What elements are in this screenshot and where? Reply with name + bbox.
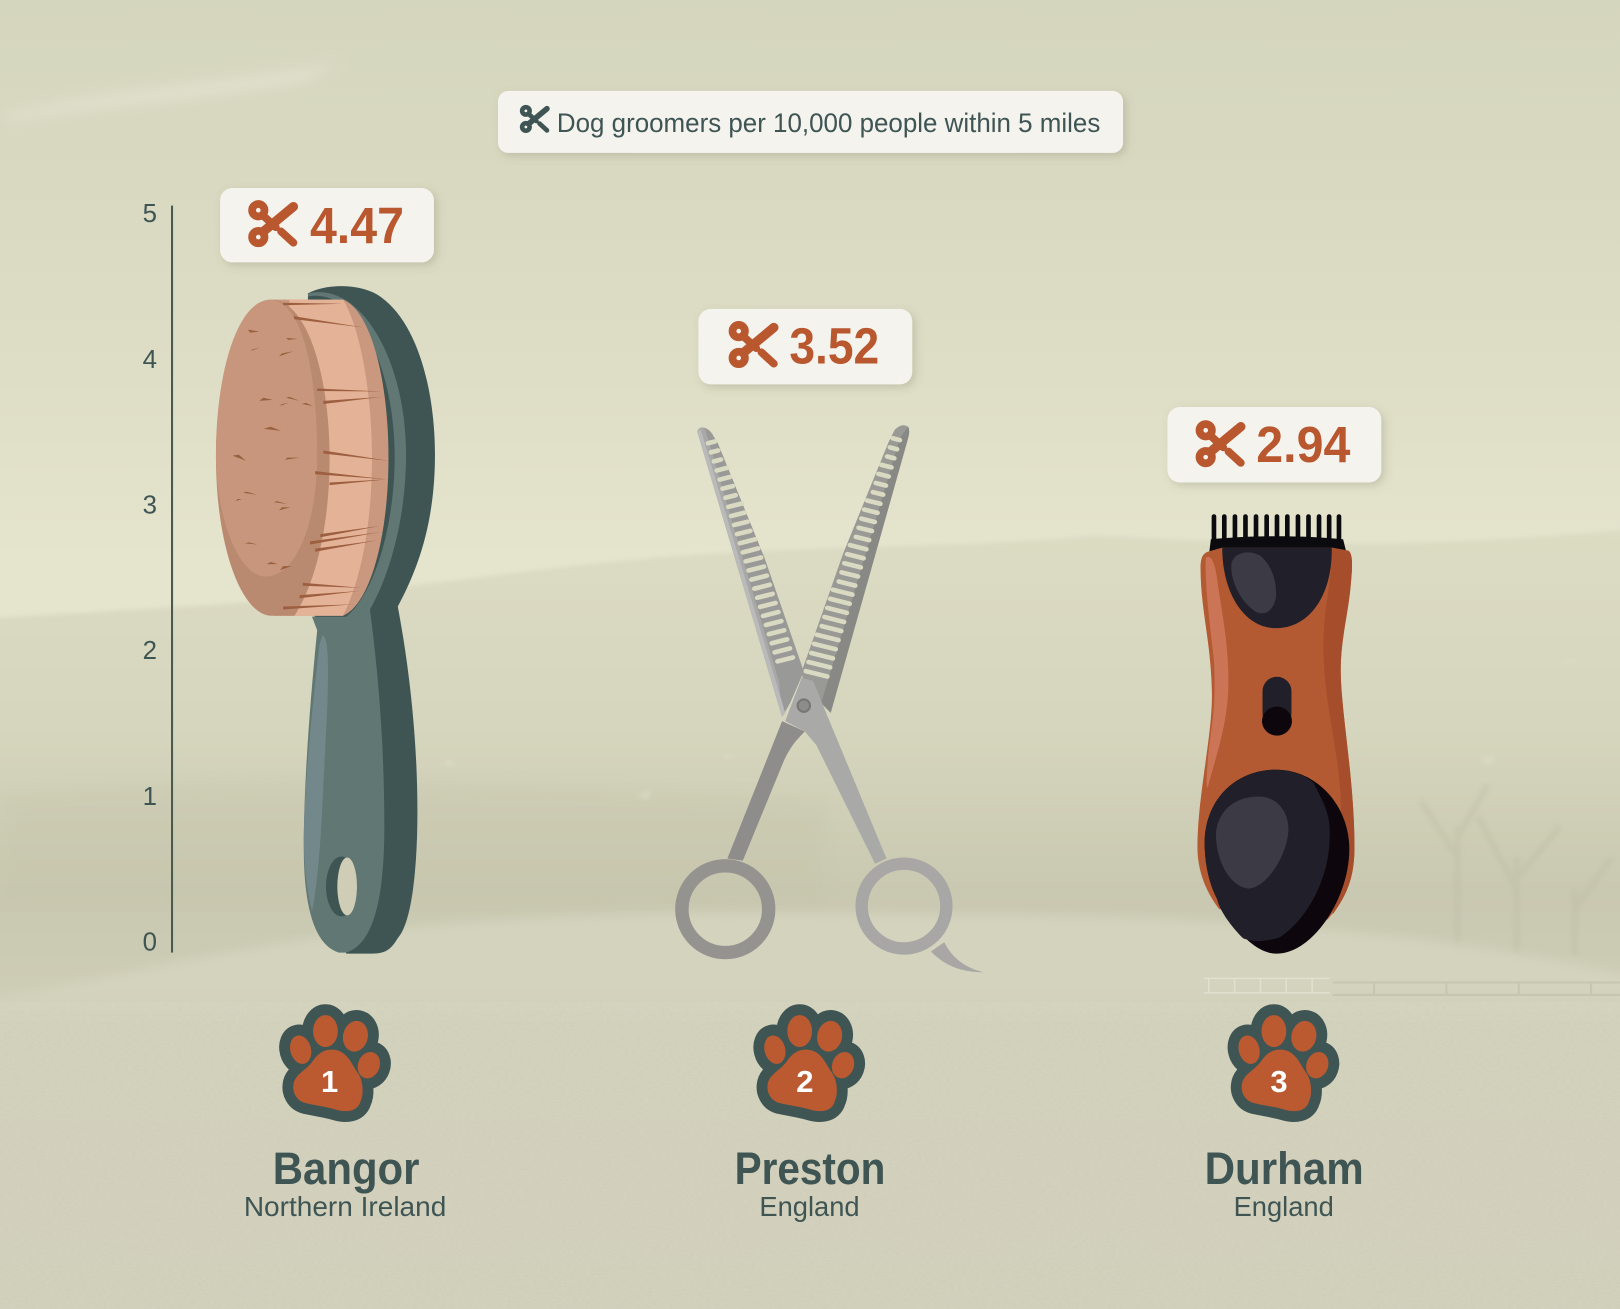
icon: scissors xyxy=(733,325,774,364)
value label: Durham xyxy=(1167,407,1381,482)
value label: Preston: 3.52 xyxy=(789,318,879,375)
clipper comb base xyxy=(1209,536,1346,556)
place label: Bangor xyxy=(244,1143,446,1222)
axis: 4 xyxy=(143,346,157,374)
place label: Bangor: Bangor xyxy=(273,1143,419,1194)
left blade xyxy=(697,428,804,717)
icon: scissors xyxy=(522,107,547,131)
icon: scissors xyxy=(1199,424,1241,463)
clipper teeth xyxy=(1214,517,1339,542)
finger rest xyxy=(931,942,984,972)
place label: Durham: England xyxy=(1234,1191,1334,1222)
axis: 2 xyxy=(143,637,157,665)
axis xyxy=(143,200,173,956)
value label: Durham: 2.94 xyxy=(1256,416,1350,473)
axis: 0 xyxy=(143,928,157,956)
rank badge 2: paw xyxy=(761,1015,858,1111)
clipper body xyxy=(1197,548,1354,920)
pivot screw xyxy=(798,699,810,712)
value label: Preston xyxy=(698,309,912,384)
rank badge 1: paw xyxy=(287,1015,384,1111)
right finger ring xyxy=(862,864,946,948)
left handle arm xyxy=(727,721,805,861)
left finger ring xyxy=(682,866,769,953)
rank badge 1: paw: 1 xyxy=(321,1064,338,1099)
illustration: thinning scissors xyxy=(682,425,984,972)
axis: 1 xyxy=(143,783,157,811)
value label: Bangor: 4.47 xyxy=(310,197,404,254)
hanging hole xyxy=(326,856,357,916)
place label: Preston: Preston xyxy=(735,1143,885,1194)
place label: Preston: England xyxy=(759,1191,860,1222)
base cap xyxy=(1205,770,1349,954)
illustration: electric clipper xyxy=(1197,517,1354,954)
right blade xyxy=(802,425,909,713)
place label: Preston xyxy=(735,1143,885,1222)
brush pad xyxy=(216,300,388,616)
top button xyxy=(1222,548,1332,628)
rank badge 3: paw xyxy=(1235,1015,1332,1111)
pivot and right handle arm xyxy=(785,678,886,864)
axis: 5 xyxy=(143,200,157,228)
header legend xyxy=(498,91,1123,153)
place label: Bangor: Northern Ireland xyxy=(244,1191,446,1222)
slider switch xyxy=(1262,677,1292,736)
illustration: brush xyxy=(216,286,435,954)
place label: Durham xyxy=(1205,1143,1364,1222)
rank badge 3: paw: 3 xyxy=(1270,1064,1288,1099)
legend text: Dog groomers per 10,000 people within 5 miles xyxy=(557,108,1100,138)
icon: scissors xyxy=(252,204,293,243)
value label: Bangor xyxy=(220,188,434,262)
axis: 3 xyxy=(143,491,157,519)
place label: Durham: Durham xyxy=(1205,1143,1364,1194)
rank badge 2: paw: 2 xyxy=(796,1064,813,1099)
